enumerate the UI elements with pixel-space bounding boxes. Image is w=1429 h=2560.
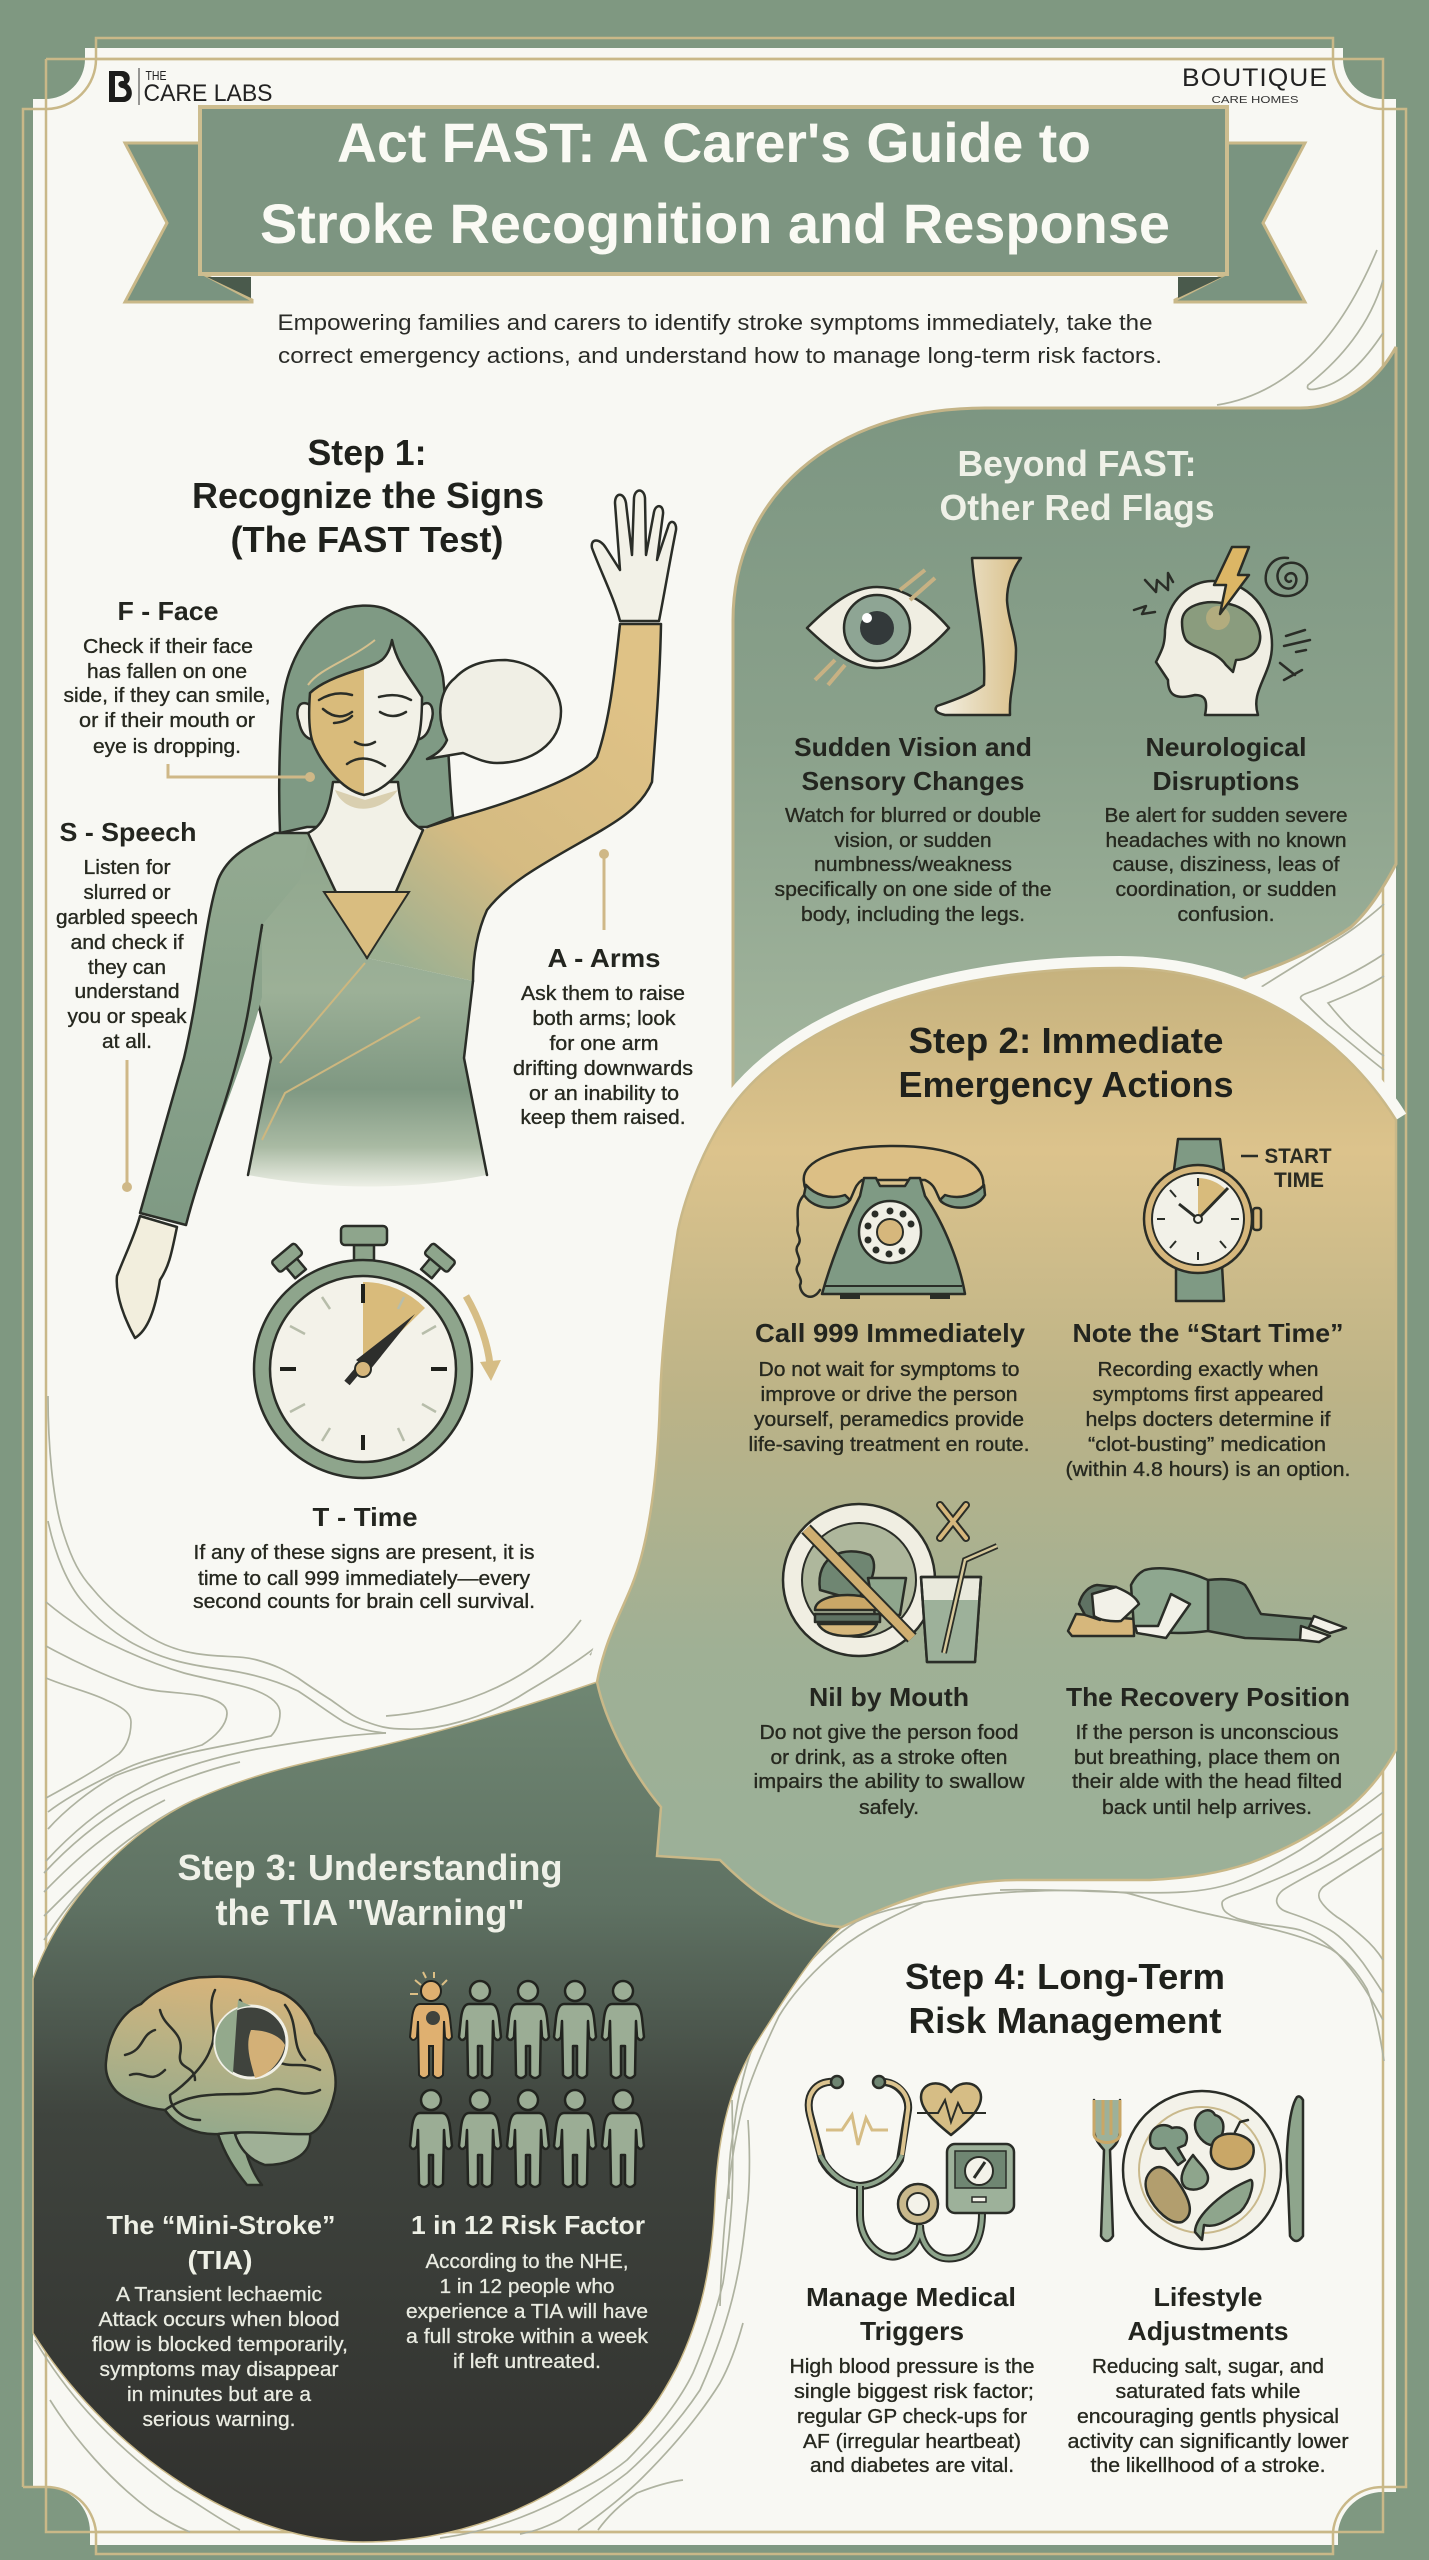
item: neurological disruptions: Be alert for sudden severe xyxy=(1104,804,1348,827)
raised arm xyxy=(367,624,661,981)
item: mini stroke: serious warning. xyxy=(142,2408,296,2431)
raised hand xyxy=(592,490,676,621)
heading: step 2 xyxy=(898,1020,1234,1105)
item: call 999: Call 999 Immediately xyxy=(755,1318,1026,1348)
callout: S - speech: at all. xyxy=(102,1030,152,1053)
callout: A - arms: keep them raised. xyxy=(520,1106,686,1129)
heading: step 3 xyxy=(178,1847,562,1933)
callout: A - arms: or an inability to xyxy=(529,1082,679,1105)
callout: S - speech: understand xyxy=(74,980,180,1003)
item: manage medical triggers: Triggers xyxy=(860,2316,964,2346)
heading: step 3: the TIA "Warning" xyxy=(216,1892,524,1933)
icon: stethoscope, heart and monitor xyxy=(809,2076,1014,2258)
logo: the care labs xyxy=(109,68,272,107)
item: lifestyle adjustments: Adjustments xyxy=(1128,2316,1288,2346)
item: recovery position: If the person is unconscious xyxy=(1076,1721,1338,1744)
item: 1 in 12 risk factor: 1 in 12 people who xyxy=(440,2275,614,2298)
item: nil by mouth: or drink, as a stroke often xyxy=(770,1746,1008,1769)
callout: F - face: Check if their face xyxy=(83,635,253,658)
logo: boutique care homes: CARE HOMES xyxy=(1212,94,1298,106)
item: call 999: life-saving treatment en route. xyxy=(748,1433,1030,1456)
item: sudden vision xyxy=(774,732,1052,926)
heading: step 1: (The FAST Test) xyxy=(230,519,504,560)
speech bubble xyxy=(427,660,561,763)
item: manage medical triggers xyxy=(790,2282,1034,2477)
swirl lines: lower left xyxy=(44,1396,672,1940)
callout: S - speech xyxy=(56,817,198,1192)
item: mini stroke: in minutes but are a xyxy=(127,2383,312,2406)
label: start time xyxy=(1241,1145,1332,1192)
callout: S - speech: and check if xyxy=(70,931,184,954)
logo: boutique care homes: BOUTIQUE xyxy=(1182,64,1328,92)
callout: S - speech: S - Speech xyxy=(60,817,196,847)
item: 1 in 12 risk factor: a full stroke within a week xyxy=(406,2325,649,2348)
heading: beyond FAST: Other Red Flags xyxy=(940,487,1214,528)
icon: stopwatch xyxy=(254,1226,501,1478)
item: 1 in 12 risk factor: if left untreated. xyxy=(453,2350,601,2373)
hair xyxy=(279,606,453,833)
callout: S - speech: Listen for xyxy=(84,856,171,879)
item: sudden vision: Sensory Changes xyxy=(802,766,1024,796)
item: sudden vision: Watch for blurred or double xyxy=(785,804,1041,827)
item: note the start time: Recording exactly when xyxy=(1098,1358,1318,1381)
item: nil by mouth: Do not give the person food xyxy=(760,1721,1018,1744)
swirl lines: right of beyond FAST and top right xyxy=(1217,250,1384,1087)
heading: step 4: Step 4: Long-Term xyxy=(905,1956,1225,1997)
left arm xyxy=(140,833,310,1225)
callout: T - time: second counts for brain cell survival. xyxy=(193,1590,535,1613)
subtitle: correct emergency actions, and understand how to manage long-term risk factors. xyxy=(278,343,1162,368)
item: manage medical triggers: High blood pressure is the xyxy=(790,2355,1034,2378)
panel: step 3 TIA xyxy=(33,1682,842,2542)
heading: step 4: Risk Management xyxy=(908,2000,1222,2041)
item: nil by mouth: impairs the ability to swallow xyxy=(754,1770,1025,1793)
item: nil by mouth: safely. xyxy=(859,1796,919,1819)
label: start time: START xyxy=(1264,1145,1332,1168)
icon: nil by mouth plate and glass xyxy=(783,1504,997,1662)
item: neurological disruptions: Disruptions xyxy=(1152,766,1300,796)
item: neurological disruptions: Neurological xyxy=(1146,732,1306,762)
item: mini stroke: symptoms may disappear xyxy=(100,2358,339,2381)
item: note the start time: symptoms first appeared xyxy=(1092,1383,1324,1406)
callout: F - face: eye is dropping. xyxy=(93,735,241,758)
icon: rotary telephone xyxy=(797,1146,985,1299)
subtitle: Empowering families and carers to identify stroke symptoms immediately, take the xyxy=(278,310,1152,335)
heading: beyond FAST: Beyond FAST: xyxy=(958,443,1196,484)
item: sudden vision: numbness/weakness xyxy=(814,853,1012,876)
item: mini stroke xyxy=(92,2210,348,2431)
callout: T - time xyxy=(193,1502,535,1613)
item: mini stroke: Attack occurs when blood xyxy=(98,2308,340,2331)
callout: F - face xyxy=(64,596,315,782)
item: sudden vision: body, including the legs. xyxy=(801,903,1025,926)
swirl lines: around step 4 xyxy=(720,1792,1384,2306)
subtitle xyxy=(278,310,1162,368)
callout: S - speech: slurred or xyxy=(84,881,171,904)
item: mini stroke: A Transient lechaemic xyxy=(116,2283,322,2306)
icon: leg xyxy=(936,558,1021,715)
item: neurological disruptions: coordination, or sudden xyxy=(1116,878,1336,901)
icon: watch with start time xyxy=(1144,1139,1261,1301)
title text: Stroke Recognition and Response xyxy=(260,192,1170,255)
callout: S - speech: you or speak xyxy=(68,1005,187,1028)
heading: step 4 xyxy=(905,1956,1225,2041)
heading: step 1 xyxy=(192,432,544,560)
item: lifestyle adjustments: encouraging gentls physical xyxy=(1077,2405,1339,2428)
swirl lines: bottom around step 3 xyxy=(35,2100,750,2538)
logo: the care labs: THE xyxy=(146,68,167,83)
item: 1 in 12 risk factor: 1 in 12 Risk Factor xyxy=(411,2210,645,2240)
shirt folds xyxy=(262,963,420,1140)
icon: fork, plate and knife xyxy=(1094,2091,1303,2249)
logo: the care labs: CARE LABS xyxy=(144,80,272,107)
callout: A - arms: for one arm xyxy=(550,1032,658,1055)
heading: step 3: Step 3: Understanding xyxy=(178,1847,562,1888)
heading: step 2: Step 2: Immediate xyxy=(908,1020,1224,1061)
item: note the start time: helps docters determine if xyxy=(1086,1408,1331,1431)
heading: step 1: Step 1: xyxy=(308,432,426,473)
item: nil by mouth: Nil by Mouth xyxy=(809,1682,969,1712)
item: note the start time xyxy=(1066,1318,1350,1481)
panel: step 4 long-term risk xyxy=(790,1956,1349,2477)
icon: 1 in 10 people xyxy=(410,1972,644,2187)
callout: T - time: time to call 999 immediately—every xyxy=(198,1567,531,1590)
neckline xyxy=(308,782,423,958)
callout: S - speech: garbled speech xyxy=(56,906,198,929)
torso side lines xyxy=(248,925,487,1175)
item: recovery position: but breathing, place them on xyxy=(1074,1746,1340,1769)
icon: recovery position xyxy=(1068,1568,1346,1642)
icon: eye xyxy=(807,570,949,685)
item: lifestyle adjustments: activity can significantly lower xyxy=(1068,2430,1349,2453)
item: recovery position xyxy=(1066,1682,1350,1819)
item: manage medical triggers: single biggest risk factor; xyxy=(794,2380,1034,2403)
item: mini stroke: The “Mini-Stroke” xyxy=(106,2210,336,2240)
item: note the start time: Note the “Start Time” xyxy=(1072,1318,1344,1348)
item: lifestyle adjustments: the likellhood of a stroke. xyxy=(1090,2454,1326,2477)
item: neurological disruptions: confusion. xyxy=(1178,903,1274,926)
item: recovery position: back until help arrives. xyxy=(1102,1796,1312,1819)
callout: F - face: F - Face xyxy=(118,596,218,626)
panel: step 2 emergency actions xyxy=(597,968,1396,1927)
logo: boutique care homes xyxy=(1182,64,1328,106)
title text: Act FAST: A Carer's Guide to xyxy=(337,111,1091,174)
heading: beyond FAST xyxy=(940,443,1214,528)
raised arm outline xyxy=(427,624,661,981)
callout: F - face: or if their mouth or xyxy=(79,709,255,732)
torso xyxy=(248,833,487,1186)
item: 1 in 12 risk factor: According to the NHE, xyxy=(426,2250,628,2273)
item: neurological disruptions: cause, disziness, leas of xyxy=(1112,853,1340,876)
callout: A - arms: drifting downwards xyxy=(513,1057,693,1080)
heading: step 1: Recognize the Signs xyxy=(192,475,544,516)
title banner xyxy=(125,107,1305,302)
callout: F - face: has fallen on one xyxy=(87,660,247,683)
item: sudden vision: vision, or sudden xyxy=(834,829,992,852)
item: manage medical triggers: AF (irregular heartbeat) xyxy=(803,2430,1021,2453)
item: mini stroke: (TIA) xyxy=(188,2245,252,2275)
item: sudden vision: Sudden Vision and xyxy=(794,732,1032,762)
item: 1 in 12 risk factor: experience a TIA will have xyxy=(406,2300,648,2323)
item: note the start time: (within 4.8 hours) is an option. xyxy=(1066,1458,1350,1481)
item: neurological disruptions: headaches with no known xyxy=(1106,829,1346,852)
item: note the start time: “clot-busting” medication xyxy=(1088,1433,1326,1456)
title text xyxy=(260,111,1170,255)
item: lifestyle adjustments: Reducing salt, sugar, and xyxy=(1092,2355,1324,2378)
item: manage medical triggers: Manage Medical xyxy=(806,2282,1016,2312)
callout: A - arms xyxy=(513,849,693,1129)
ribbon tails xyxy=(125,143,1305,302)
callout: T - time: If any of these signs are present, it is xyxy=(194,1541,534,1564)
callout: A - arms: Ask them to raise xyxy=(521,982,685,1005)
item: call 999 xyxy=(748,1318,1030,1456)
item: lifestyle adjustments xyxy=(1068,2282,1349,2477)
item: recovery position: The Recovery Position xyxy=(1066,1682,1350,1712)
item: call 999: Do not wait for symptoms to xyxy=(758,1358,1020,1381)
illustration: person performing FAST test xyxy=(117,490,676,1338)
label: start time: TIME xyxy=(1274,1169,1324,1192)
item: neurological disruptions xyxy=(1104,732,1348,926)
icon: brain xyxy=(106,1977,336,2185)
callout: A - arms: both arms; look xyxy=(532,1007,676,1030)
item: lifestyle adjustments: Lifestyle xyxy=(1154,2282,1262,2312)
callout: T - time: T - Time xyxy=(312,1502,418,1532)
item: 1 in 12 risk factor xyxy=(406,2210,649,2373)
face xyxy=(297,640,433,795)
icon: head with lightning xyxy=(1134,547,1310,715)
item: call 999: yourself, peramedics provide xyxy=(754,1408,1024,1431)
item: manage medical triggers: and diabetes are vital. xyxy=(810,2454,1014,2477)
item: nil by mouth xyxy=(754,1682,1025,1819)
callout: F - face: side, if they can smile, xyxy=(64,684,270,707)
item: lifestyle adjustments: saturated fats while xyxy=(1116,2380,1300,2403)
item: sudden vision: specifically on one side of the xyxy=(774,878,1052,901)
callout: S - speech: they can xyxy=(88,956,166,979)
heading: step 2: Emergency Actions xyxy=(898,1064,1234,1105)
item: recovery position: their alde with the head filted xyxy=(1072,1770,1342,1793)
panel: beyond FAST other red flags xyxy=(733,347,1396,1130)
item: mini stroke: flow is blocked temporarily, xyxy=(92,2333,348,2356)
callout: A - arms: A - Arms xyxy=(548,943,660,973)
item: call 999: improve or drive the person xyxy=(760,1383,1018,1406)
left arm outline xyxy=(140,833,310,1225)
left hand xyxy=(117,1216,177,1338)
item: manage medical triggers: regular GP check-ups for xyxy=(797,2405,1027,2428)
